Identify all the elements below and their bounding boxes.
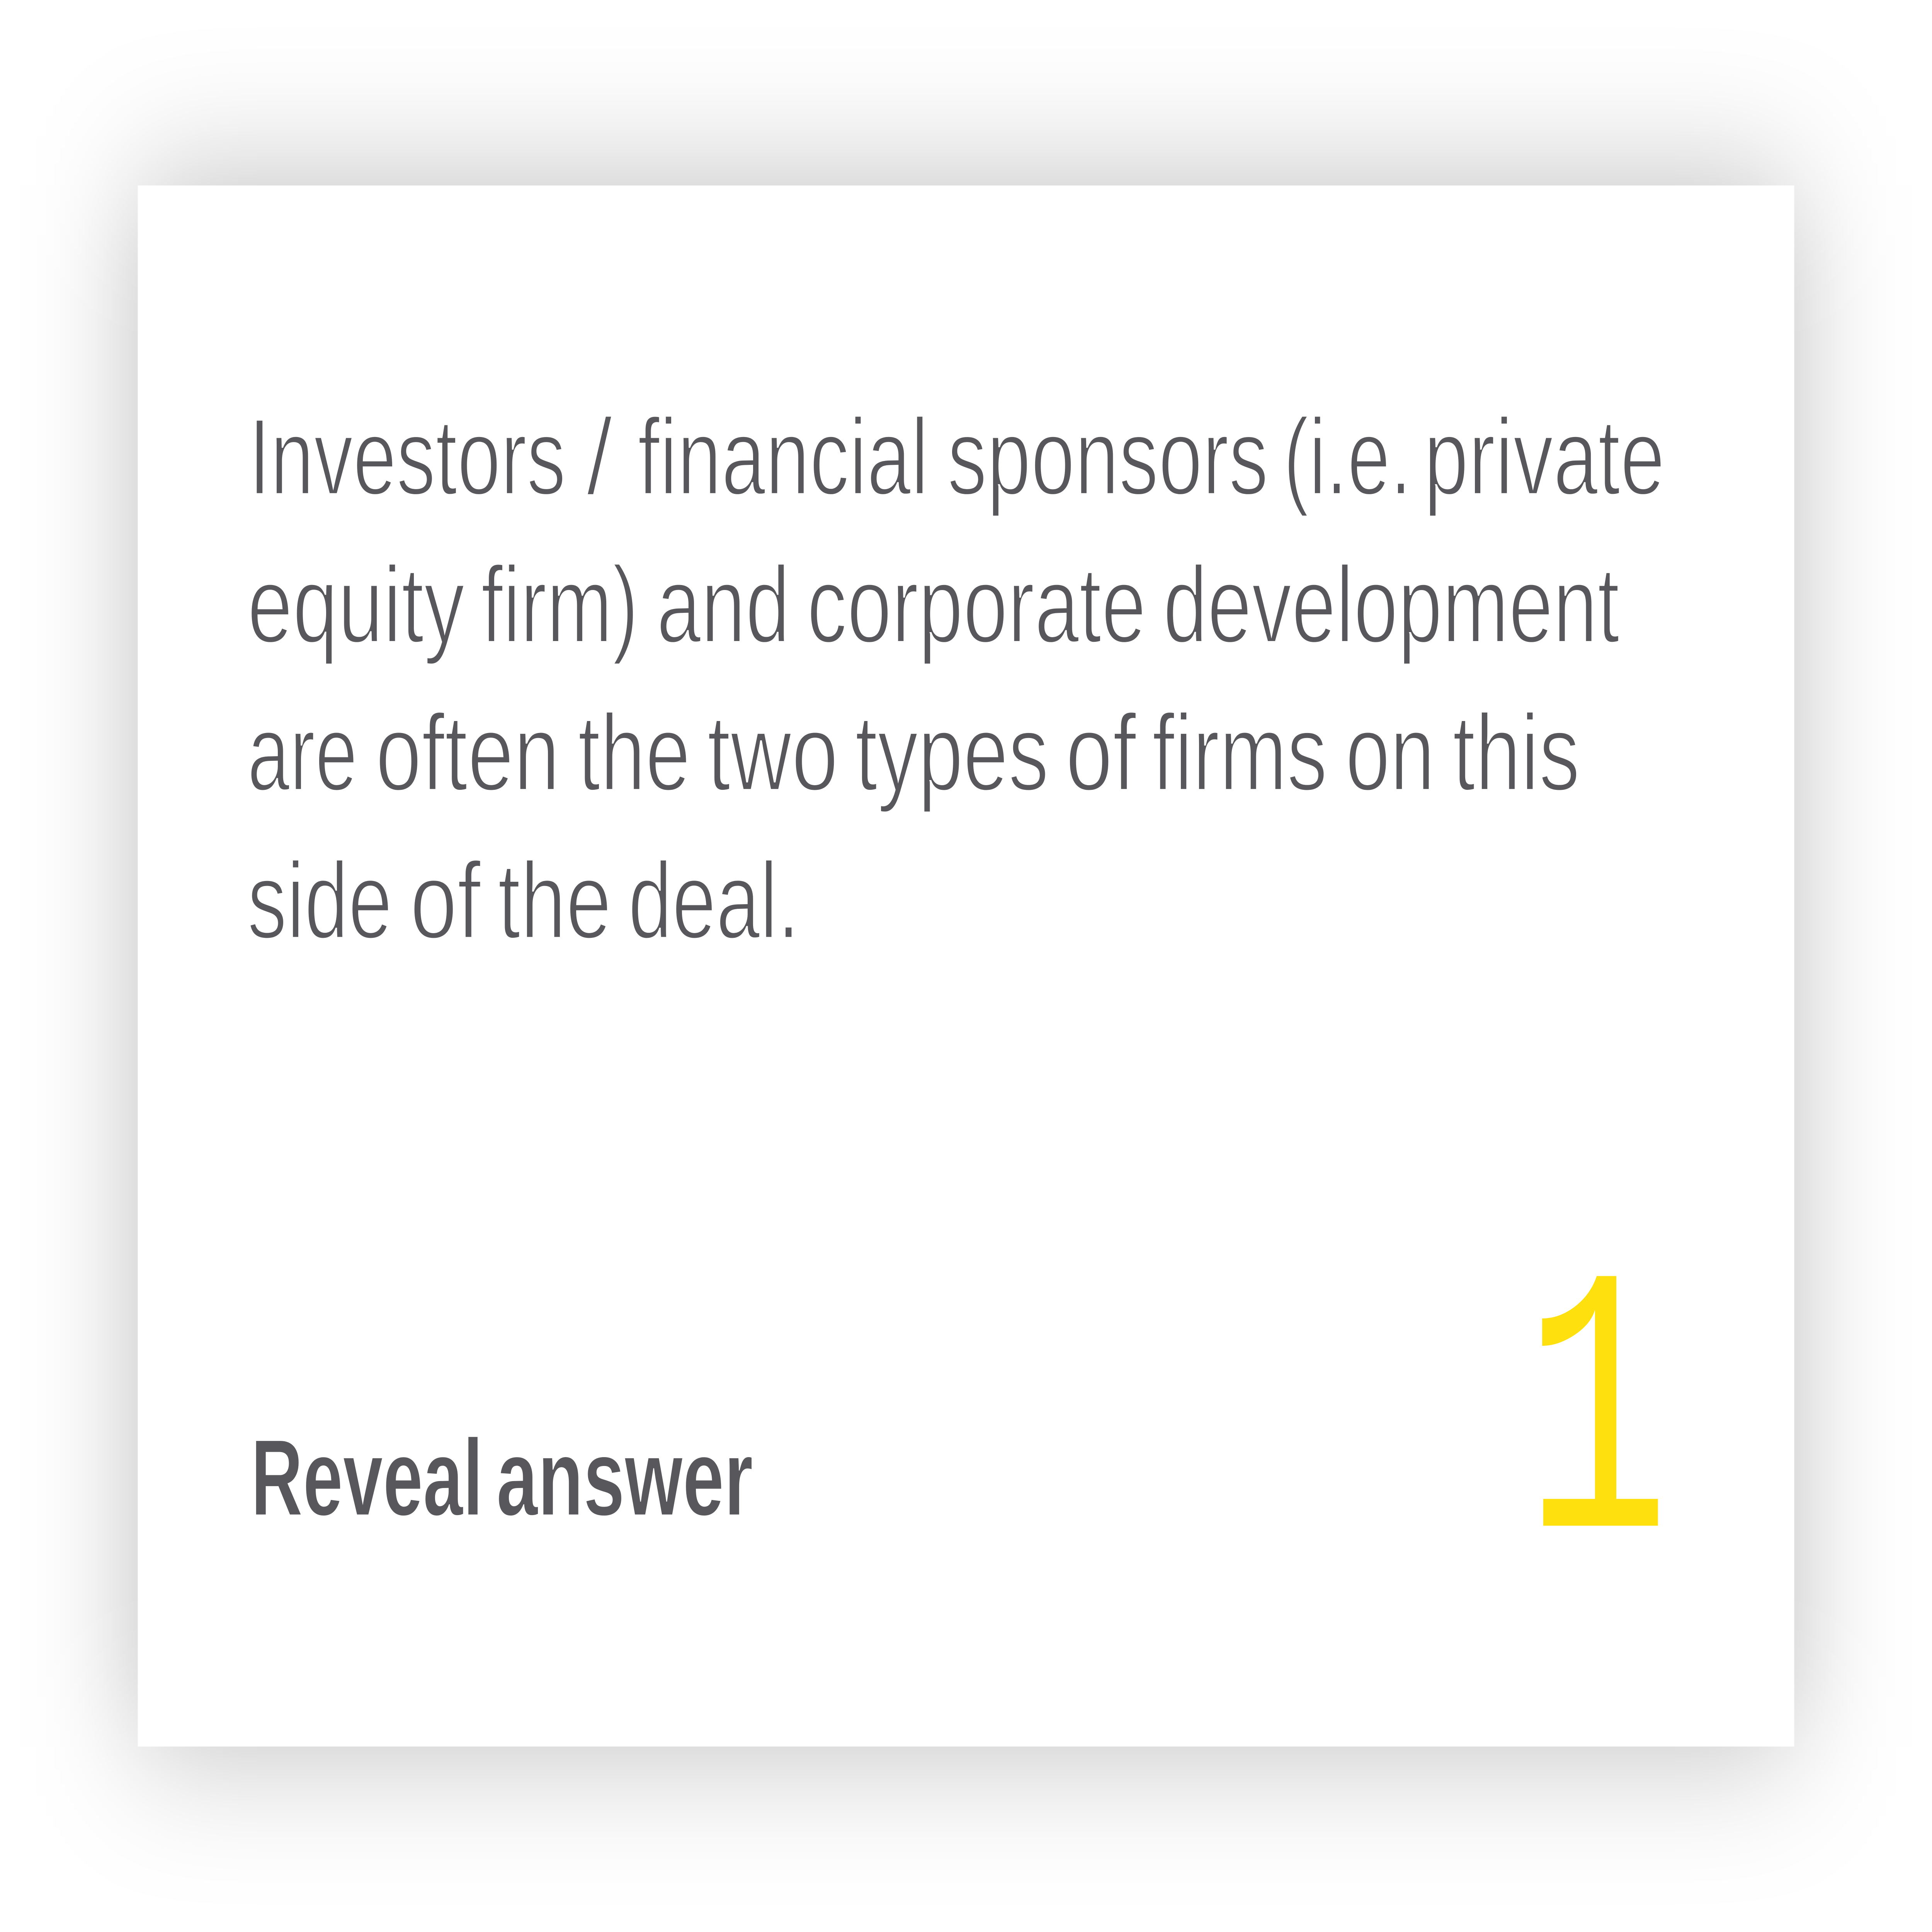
text block: clue text: often [376, 692, 560, 813]
text block: clue text: the [578, 692, 690, 813]
button label: reveal answer: answer [497, 1417, 753, 1538]
text block: clue text: types [855, 692, 1049, 813]
text block: clue text: / [587, 396, 612, 517]
button label: reveal answer: Reveal [251, 1417, 483, 1538]
text block: clue text: this [1452, 692, 1580, 813]
text block: clue text: sponsors [947, 396, 1268, 517]
text block: clue text: on [1345, 692, 1435, 813]
text block: clue text: private [1424, 396, 1665, 517]
text block: clue text: firms [1152, 692, 1327, 813]
card number: 1 [1525, 1211, 1670, 1640]
text block: clue text: deal. [628, 840, 799, 961]
text block: clue text: equity [247, 544, 465, 665]
text block: clue text: corporate [807, 544, 1146, 665]
text block: clue text: (i.e. [1283, 396, 1412, 517]
text block: clue text: are [247, 692, 357, 813]
text block: clue text: financial [638, 396, 929, 517]
text block: clue text: side [247, 840, 392, 961]
text block: clue text: and [656, 544, 790, 665]
text block: clue text: Investors [249, 396, 566, 517]
text block: clue text [247, 396, 1665, 961]
text block: clue text: two [707, 692, 838, 813]
text block: clue text: development [1163, 544, 1619, 665]
text block: clue text: of [1065, 692, 1137, 813]
panel: white card [138, 185, 1794, 1747]
text block: clue text: firm) [481, 544, 639, 665]
text block: clue text: the [498, 840, 611, 961]
card shadow [138, 185, 1794, 1747]
text block: clue text: of [410, 840, 481, 961]
